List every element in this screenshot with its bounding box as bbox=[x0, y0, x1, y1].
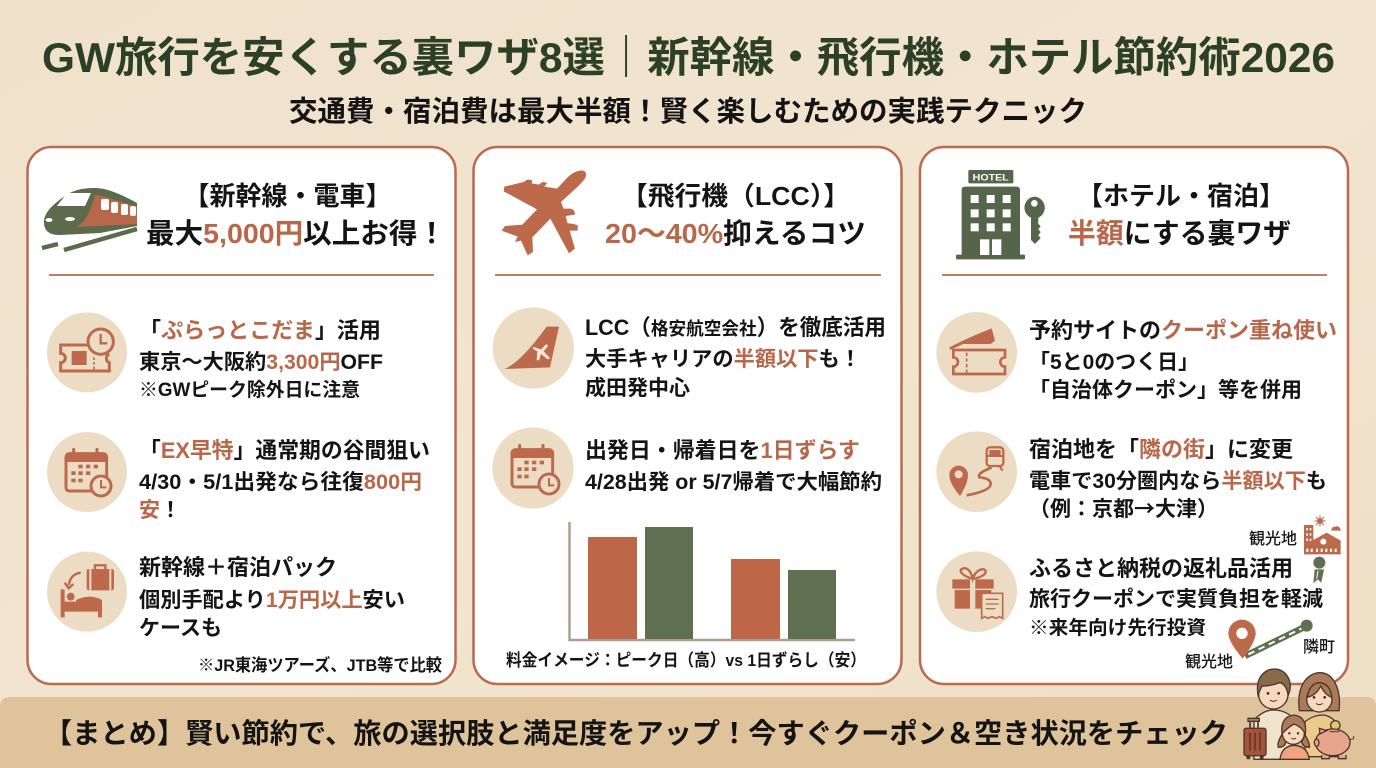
tip: EX hayatoku bbox=[47, 432, 430, 522]
summary text: 【まとめ】賢い節約で、旅の選択肢と満足度をアップ！今すぐクーポン＆空き状況をチェック bbox=[44, 718, 1228, 749]
text: puratto kodama: ※GWピーク除外日に注意 bbox=[139, 379, 360, 401]
text: neighbouring town bbox=[1029, 437, 1327, 523]
text: neighbouring town: 宿泊地を「隣の街」に変更 bbox=[1029, 437, 1293, 462]
heading: hotels: 半額にする裏ワザ bbox=[1068, 218, 1291, 249]
heading: airplane: 20～40%抑えるコツ bbox=[605, 218, 866, 249]
label: neighbouring town: 隣町 bbox=[1303, 638, 1335, 656]
text: EX hayatoku: 4/30・5/1出発なら往復 800円 bbox=[139, 471, 422, 494]
text: shift dates bbox=[585, 438, 882, 494]
bar chart: peak vs shifted fares bbox=[570, 522, 855, 640]
text: neighbouring town: 電車で30分圏内なら半額以下も bbox=[1029, 470, 1327, 493]
text: hotel pack: 新幹線＋宿泊パック bbox=[139, 555, 337, 580]
icon: ticket and clock bbox=[47, 312, 127, 392]
heading: airplane bbox=[605, 181, 866, 249]
text: furusato nozei bbox=[1029, 556, 1323, 639]
heading: hotels bbox=[1068, 181, 1291, 249]
summary bar bbox=[0, 697, 1376, 768]
subtitle: 交通費・宿泊費は最大半額！賢く楽しむための実践テクニック bbox=[289, 96, 1087, 128]
text: puratto kodama bbox=[139, 318, 383, 401]
text: LCC: 成田発中心 bbox=[585, 376, 690, 400]
text: EX hayatoku: 「EX早特」通常期の谷間狙い bbox=[139, 438, 430, 463]
icon: train bbox=[42, 188, 137, 250]
icon: rail route between pin and town bbox=[1228, 620, 1313, 659]
dad bbox=[1254, 669, 1295, 759]
text: LCC: LCC（格安航空会社）を徹底活用 bbox=[585, 315, 886, 340]
piggy bank bbox=[1314, 721, 1354, 759]
tip: neighbouring town bbox=[936, 431, 1327, 523]
girl bbox=[1278, 715, 1309, 759]
tip: shift dates bbox=[492, 427, 882, 509]
text: furusato nozei: 旅行クーポンで実質負担を軽減 bbox=[1029, 587, 1323, 611]
tip: LCC bbox=[493, 307, 886, 400]
panel: hotels bbox=[920, 147, 1348, 684]
icon: green route marker bbox=[1313, 557, 1325, 583]
text: coupons: 「5と0のつく日」 bbox=[1029, 351, 1199, 374]
text: shift dates: 出発日・帰着日を1日ずらす bbox=[585, 438, 860, 463]
text: neighbouring town: （例：京都→大津） bbox=[1029, 493, 1218, 523]
icon: hotel and key: HOTEL bbox=[973, 172, 1009, 182]
text: coupons: 「自治体クーポン」等を併用 bbox=[1029, 379, 1302, 402]
suitcase bbox=[1244, 718, 1266, 759]
label: sightseeing spot bottom: 観光地 bbox=[1185, 653, 1233, 671]
icon: hotel and key bbox=[956, 170, 1045, 259]
tip: furusato nozei bbox=[936, 551, 1323, 639]
note: compare sites: ※JR東海ツアーズ、JTB等で比較 bbox=[198, 655, 442, 675]
icon: suitcase and bed bbox=[47, 552, 127, 632]
icon: gift and receipt bbox=[936, 551, 1017, 632]
text: coupons: 予約サイトのクーポン重ね使い bbox=[1029, 318, 1337, 343]
icon: calendar bbox=[47, 432, 127, 512]
heading: airplane: 【飛行機（LCC）】 bbox=[621, 181, 850, 211]
tip: puratto kodama bbox=[47, 312, 383, 401]
text: EX hayatoku bbox=[139, 438, 430, 522]
icon: coupon tickets bbox=[936, 312, 1017, 393]
text: hotel pack: ケースも bbox=[139, 617, 222, 640]
title: GW旅行を安くする裏ワザ8選｜新幹線・飛行機・ホテル節約術2026 bbox=[42, 34, 1335, 81]
mom bbox=[1299, 673, 1339, 757]
icon: airplane bbox=[502, 170, 586, 255]
panel: shinkansen and trains bbox=[28, 147, 456, 684]
heading: shinkansen bbox=[146, 181, 446, 249]
map illustration: sightseeing spot and neighbouring town bbox=[1185, 515, 1341, 671]
text: shift dates: 4/28出発 or 5/7帰着で大幅節約 bbox=[585, 471, 882, 494]
icon: pin route and train bbox=[936, 431, 1017, 512]
label: sightseeing spot top: 観光地 bbox=[1249, 530, 1297, 548]
icon: calendar bbox=[492, 427, 574, 509]
heading: shinkansen: 【新幹線・電車】 bbox=[184, 181, 392, 211]
text: LCC bbox=[585, 315, 886, 400]
chart caption: 料金イメージ：ピーク日（高）vs 1日ずらし（安） bbox=[506, 650, 866, 670]
icon: sightseeing building bbox=[1304, 515, 1341, 554]
text: furusato nozei: ※来年向け先行投資 bbox=[1029, 616, 1206, 639]
heading: shinkansen: 最大5,000円以上お得！ bbox=[146, 218, 446, 249]
panel: airplane LCC bbox=[474, 147, 902, 684]
tip: shinkansen hotel pack bbox=[47, 552, 405, 640]
illustration: family with suitcase and piggy bank bbox=[1244, 669, 1354, 759]
text: hotel pack bbox=[139, 555, 405, 640]
text: EX hayatoku: 安！ bbox=[139, 499, 181, 522]
heading: hotels: 【ホテル・宿泊】 bbox=[1077, 181, 1285, 211]
text: puratto kodama: 東京～大阪約3,300円OFF bbox=[139, 351, 383, 374]
text: coupons bbox=[1029, 318, 1337, 402]
text: LCC: 大手キャリアの半額以下も！ bbox=[585, 348, 861, 371]
tip: coupons bbox=[936, 312, 1337, 402]
text: furusato nozei: ふるさと納税の返礼品活用 bbox=[1029, 556, 1293, 581]
icon: aircraft tail bbox=[493, 307, 574, 389]
text: hotel pack: 個別手配より1万円以上安い bbox=[139, 589, 405, 612]
text: puratto kodama: 「ぷらっとこだま」活用 bbox=[139, 318, 381, 343]
